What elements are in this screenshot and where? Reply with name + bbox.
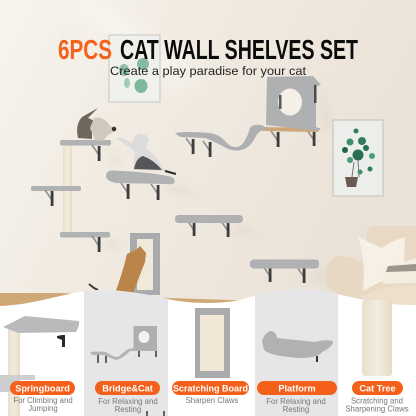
scratching board with orange cat <box>89 233 160 296</box>
label: bridge and cat: For Relaxing and <box>98 397 158 406</box>
label: bridge and cat: Resting <box>115 405 141 414</box>
framed picture: plant <box>333 120 383 196</box>
cat: sitting grey tabby <box>117 134 176 175</box>
label: springboard: Jumping <box>28 404 58 413</box>
label: springboard: For Climbing and <box>13 396 73 405</box>
sofa with pillows <box>325 226 416 306</box>
label: bridge and cat <box>95 381 160 414</box>
panel: bridge and cat background <box>84 290 168 416</box>
label: scratching board: Sharpen Claws <box>186 396 239 405</box>
cat: jumping kitten <box>77 108 117 141</box>
label: cat tree <box>345 381 409 414</box>
label: cat tree: Sharpening Claws <box>345 404 409 414</box>
label: platform: Resting <box>283 405 309 414</box>
label: platform: For Relaxing and <box>266 397 326 406</box>
label: cat tree: Scratching and <box>351 396 403 406</box>
product: springboard <box>0 316 79 416</box>
label: platform <box>257 381 337 414</box>
title <box>58 34 358 65</box>
label: bridge and cat: Bridge&Cat <box>102 383 153 393</box>
subtitle: Create a play paradise for your cat <box>110 64 307 78</box>
shelf: lower right <box>250 260 319 283</box>
shelf: bridge and cat house <box>175 76 321 157</box>
label: cat tree: Cat Tree <box>359 383 396 393</box>
label: springboard: Springboard <box>15 383 70 393</box>
product: scratching board <box>195 308 230 378</box>
label: scratching board: Scratching Board <box>173 383 248 393</box>
title: 6PCS <box>58 34 112 65</box>
panel: platform background <box>255 289 338 416</box>
wall background <box>0 0 416 320</box>
shelf: lower middle <box>175 215 243 237</box>
label: springboard <box>10 381 75 413</box>
shelf: top post shelf with cats <box>31 140 111 252</box>
product: platform <box>262 331 333 362</box>
bottom white wave panel <box>0 289 416 416</box>
product: bridge and cat <box>90 326 164 416</box>
label: scratching board <box>172 381 249 405</box>
shelf: middle with curved edge <box>106 170 175 200</box>
framed picture: monstera <box>109 35 160 102</box>
label: platform: Platform <box>278 383 316 393</box>
floor strip <box>0 293 260 320</box>
product: cat tree post <box>362 300 392 376</box>
